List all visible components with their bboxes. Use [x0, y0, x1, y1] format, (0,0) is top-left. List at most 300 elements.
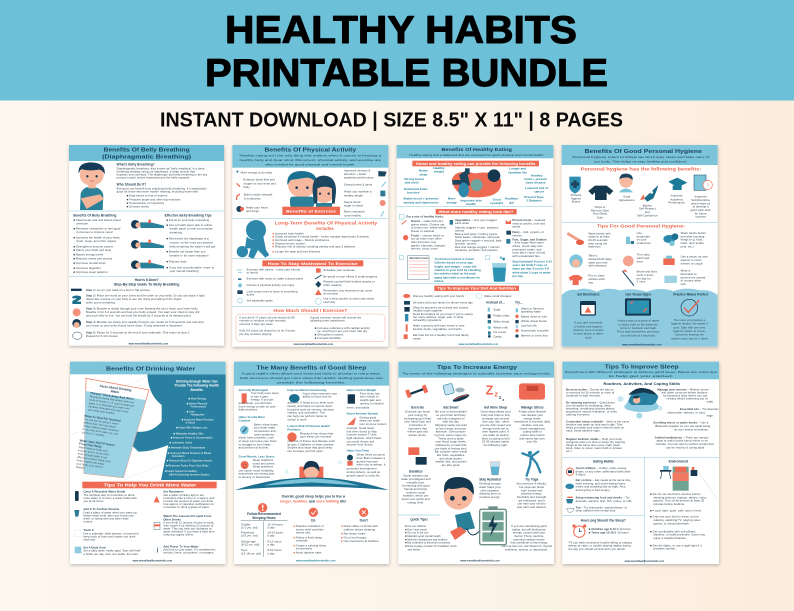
panel: eating habits	[565, 459, 633, 513]
list: benefits of belly breathing	[73, 214, 121, 274]
benefit icons row: Self-Confidence	[637, 213, 658, 217]
footer url: www.mentalhealthcenterkids.com	[459, 343, 499, 346]
tip: manage stress: energy levels.	[523, 416, 542, 420]
tips column one: wash your hair	[588, 260, 608, 264]
list: diet tips: Shop for groceries as a family and choose	[413, 305, 469, 309]
text block: food groups: Starchy veggies = corn, potatoes,	[455, 225, 499, 229]
column: right benefits: been linked to	[360, 395, 379, 399]
column: recommended sleeping hours: (6-12 yrs. old)	[241, 542, 259, 546]
footer url: www.mentalhealthcenterkids.com	[622, 343, 662, 346]
steps: object like a tissue on your belly to see the rising and falling of the object	[86, 297, 182, 301]
labels: right benefits	[508, 167, 549, 203]
column: left benefits: Helps You Be More	[239, 415, 265, 419]
tip: eat smart: are also good.	[442, 463, 460, 467]
tip: exercise: lessen stress.	[409, 433, 427, 437]
icon: glass with facts about drinking water: your body, your skin or	[76, 462, 103, 469]
column: practice makes perfect: gets. Start with one new	[674, 325, 706, 329]
tip: socialise	[401, 447, 431, 504]
column: left benefits: Sleep stabilizes	[253, 458, 274, 462]
list: water tips left: a bottle per day, then one bottle, then two.	[83, 552, 139, 556]
icon: glass with facts about drinking water: students throughout the day. Have	[88, 405, 129, 414]
tips column three: sleeve) to cover	[681, 258, 702, 262]
list: water tips left: each day.	[83, 537, 96, 541]
list: water tips left: Use a calendar, daily planner, or journal to	[83, 531, 139, 535]
heading: routines: Routines, Activities, And Coping Skills	[603, 382, 680, 386]
text block: benefits list: Well-Functioning Immune System	[169, 472, 210, 476]
tip: eat smart: Eat complex carbs inside	[435, 450, 468, 454]
tip: get more sleep: body and brain to fully	[481, 413, 511, 417]
list: water tips right: Add fruit to your water. Try strawberries,	[163, 548, 216, 552]
text block: stay hydrated: years old drink 7 cups of	[512, 263, 547, 267]
steps: your hand on your belly should move down. A long outbreath is important.	[86, 324, 183, 328]
icon: glass with facts about drinking water: Water Gets Rid Of Toxins	[79, 438, 115, 447]
tips column three: of viruses when	[681, 279, 702, 283]
panel: quick tips	[398, 515, 457, 551]
page: benefits of physical activity	[232, 145, 388, 347]
text block: food groups	[399, 214, 547, 258]
list: benefits of belly breathing: hormones to improve mood	[77, 230, 113, 234]
text block: food groups: spinach, sprouts	[455, 242, 477, 246]
tip: socialise: mentally tired.	[407, 480, 425, 484]
benefit icons row: Against	[571, 196, 581, 200]
column: don't: caffeine before sleeping	[344, 527, 376, 531]
page: tips to increase energy	[398, 362, 554, 564]
column: left benefits: solve problems,	[254, 432, 275, 436]
tips column one: with shampoo	[588, 264, 607, 268]
column: right benefits: has been found to help	[347, 429, 377, 433]
list: effective belly breathing tips: ■ Breathe out longer than you	[166, 250, 206, 254]
tip: eat smart: These tend to spike	[438, 436, 464, 440]
column: right benefits: your immune system	[359, 422, 387, 426]
column: left benefits: Better sleep helps	[254, 422, 278, 426]
banner: benefits of exercise: Benefits of Exercise	[286, 209, 336, 213]
tip: stay hydrated: allowing them to	[479, 492, 501, 496]
right benefits list: attention + better	[344, 172, 366, 176]
benefit icons row: Academic	[670, 197, 684, 201]
small changes table: Ice cream	[493, 330, 507, 334]
column: recommended sleeping hours: (3-5 yrs. old)	[241, 534, 258, 538]
list: long-term benefits: ■ Reduces risk of obesity including obesity and type 2 diabetes	[272, 245, 356, 249]
tip: get more sleep: energy levels are at	[483, 426, 509, 430]
column: set reminders: If you can't remember	[574, 321, 602, 325]
left benefits list: Enhance blood flow and	[243, 178, 275, 182]
intro text: Healthy eating isn't the only thing that matters when it comes to keeping a	[239, 154, 382, 158]
column: middle benefits: Improved Brain Functioning	[287, 388, 327, 392]
heading: how is it done: Step-By-Step Guide To Belly Breathing	[114, 283, 180, 287]
steps: Repeat for 5-10 minutes.	[86, 334, 119, 338]
column: use visual signs: you will look at it each day.	[621, 333, 656, 337]
text block: count calories: height, and weight – count the	[434, 264, 477, 268]
column: right benefits: Poor sleep has	[360, 391, 380, 395]
column: recommended sleeping hours: (13-18 yrs. old)	[241, 551, 261, 555]
icon: child sleeping on cloud	[618, 388, 662, 419]
panel: eating habits: Eating Habits	[593, 459, 614, 463]
list: motivation right: Use a step counter to count your steps	[323, 297, 375, 301]
text block: food groups: Dark green veggies = broccoli, kale,	[455, 239, 502, 243]
panel: how much exercise: following three ingredients:	[310, 319, 346, 323]
text block: benefits list: & Mood	[186, 421, 196, 425]
text block: overall good sleep: longer, healthier, and more fulfilling life!	[280, 499, 346, 503]
list: routines left: breathing, visualizing relaxing places,	[566, 406, 615, 410]
panel: how long should you sleep: ■ Teens age 13-18 8-10 hours	[589, 530, 629, 534]
column: left benefits: mood and stress.	[253, 461, 275, 465]
text block: count calories: aging label with a coordinator for	[434, 275, 481, 279]
list: routines right	[653, 387, 719, 449]
banner: how to stay motivated	[262, 260, 363, 266]
column: right benefits: Boost Immune System	[347, 411, 379, 415]
column: don't: ■ Eat heavy meals	[341, 531, 366, 535]
tip: eat smart: Eat Smart	[444, 405, 459, 409]
text block: food groups: Vegetables – vary your veggies	[455, 218, 497, 222]
column: do: ■ Practice relaxation or	[293, 524, 324, 528]
icon: glass with facts about drinking water: survive 1-2 months.	[82, 431, 105, 437]
column: practice makes perfect: Commit to keeping the	[675, 333, 704, 337]
list: water tips left: Set a daily water intake goal. Start with half	[83, 549, 140, 553]
text block: food groups: Red and orange veggies = carrots,	[455, 245, 501, 249]
list: motivation right: as exercise	[323, 292, 339, 296]
tip: manage stress	[514, 383, 551, 444]
text block: food groups: Protein foods – seafood,	[512, 218, 546, 222]
heading: how much should I exercise: How Much Should I Exercise?	[273, 308, 348, 313]
panel: quick tips: ■ Get out in the sun	[405, 532, 429, 535]
tip: get more sleep: z	[502, 398, 504, 402]
list: water tips left: before each meal, after you brush your	[83, 513, 134, 517]
text block: count calories: advice.	[434, 279, 444, 283]
left benefits list: & endurance	[244, 196, 261, 200]
benefit icons row: Protects	[571, 193, 582, 197]
list: routines left: bedtime and wake up time each night. This	[566, 423, 623, 427]
panel: how much exercise: If you are 6-17 years old you should do 60	[239, 315, 295, 319]
benefit icons row: Improves	[695, 195, 707, 199]
labels: right benefits: Prevent Type	[524, 195, 544, 199]
panel: quick tips: ■ Don't skip meals	[405, 528, 427, 531]
tip: manage stress: stress management	[520, 426, 545, 430]
benefit icons row: which helps us	[691, 201, 711, 205]
silhouette: body with benefits	[132, 374, 226, 480]
heading: Tips To Increase Energy	[437, 365, 518, 371]
icon: glass with facts about drinking water: Research shows that people with your	[90, 395, 135, 404]
footer url: www.mentalhealthcenterkids.com	[296, 560, 336, 563]
list: routines left: things at the same time every night (read	[566, 443, 620, 447]
list: water tips right: Other Drinks	[163, 517, 181, 521]
column: recommended sleeping hours: a day	[267, 542, 275, 546]
text block: benefits list: Circulation	[172, 454, 185, 458]
small changes table: Soda	[493, 307, 501, 311]
labels: left benefits: and teeth	[405, 181, 419, 185]
list: routines right: on your device at bedtime.	[674, 427, 709, 431]
tips column three: things (e.g. food,	[681, 238, 703, 242]
icon: glass with facts about drinking water	[76, 378, 149, 478]
column: recommended sleeping hours: Teen	[241, 548, 248, 552]
tip: exercise	[404, 385, 432, 437]
column: left benefits: daily activities.	[239, 408, 258, 412]
tips column two: Trim nails,	[637, 253, 650, 257]
list: effective belly breathing tips: breath pacer to help you practice	[170, 227, 213, 231]
column: don't	[341, 508, 379, 543]
benefit icons row: to develop a	[693, 205, 709, 209]
left benefits list: oxygen to your brain and	[243, 181, 276, 185]
intro text: Kids and teens should get more sleep than adults. Getting good sleep can	[240, 376, 383, 380]
list: routines left: to exercise for 30 minutes or more of	[566, 390, 615, 394]
column: do: stress relief activities	[296, 527, 324, 531]
benefit icons row: Remove Odor	[591, 208, 609, 212]
list: long-term benefits: ■ Strong immune system	[272, 241, 306, 245]
tip: exercise: relieve pain and	[407, 430, 428, 434]
panel: how long should you sleep: **If you have consistent trouble falling or staying	[568, 540, 632, 544]
column: right benefits: Sleep helps you grow	[357, 453, 386, 457]
list: diet tips: Read food labels so you know if you're eating	[413, 312, 473, 316]
text block: what's belly breathing: What's Belly Breathing?	[117, 163, 155, 167]
page: benefits of belly breathing	[69, 145, 224, 346]
list: effective belly breathing tips: breathing	[170, 231, 182, 235]
panel: eating habits: other caffeine-free herbal teas.	[576, 509, 616, 513]
banner: tips to help you drink more water	[82, 482, 217, 488]
list: long-term benefits	[272, 231, 369, 253]
tip: socialise: make you fatigued and	[401, 477, 431, 481]
text block: food groups: Dairy – milk, yogurts, or	[512, 230, 544, 234]
icon: two children	[287, 171, 336, 208]
small changes table: Candy	[493, 334, 502, 338]
small changes table: White bread	[493, 319, 510, 323]
column: recommended sleeping hours: a day	[267, 534, 275, 538]
tip: manage stress: Investment in exercise daily,	[514, 420, 551, 424]
list: long-term benefits: ■ Improved brain health	[272, 231, 304, 235]
column: right benefits: immune system T cells	[347, 433, 377, 437]
footer url: www.mentalhealthcenterkids.com	[460, 560, 501, 563]
column: middle benefits: as type 2 diabetes or heart disease.	[287, 442, 335, 446]
list: motivation left: Exercise with others – invite your friends	[247, 267, 300, 271]
text block: stay hydrated: water per day. If you're 4-8	[511, 267, 549, 271]
icon: glass with facts about drinking water: body of needs of 1-2 cups of water per	[89, 399, 135, 408]
text block: what's belly breathing: Diaphragmatic breathing, also known as "belly breathing" is a deep	[117, 166, 205, 170]
list: routines right: Youtube. You can also try written scripts that	[655, 442, 714, 446]
tip: eat smart: start the day.	[443, 420, 460, 424]
column: middle benefits: ability to focus and be	[303, 395, 332, 399]
tip: exercise: rate, blood flow, and	[405, 420, 431, 424]
labels: right benefits: cancer	[534, 190, 545, 194]
icon: glass with facts about drinking water: kidneys toxins. If you don't	[78, 449, 110, 457]
text block: stay hydrated: drink about 5 cups or water	[512, 270, 551, 274]
text block: food groups: Eat a mix of healthy foods:	[406, 215, 444, 219]
left benefits list: Helps your heart	[246, 205, 268, 209]
heading: long-term benefits	[275, 221, 378, 231]
intro text: Try some of the following strategies to naturally increase your energy levels.	[402, 371, 551, 375]
column: recommended sleeping hours: 8-10 hours	[267, 548, 282, 552]
list: benefits of belly breathing: brain, lungs, and other organs	[77, 239, 117, 243]
column: do: ■ Follow a fixed sleep	[293, 535, 322, 539]
text block: food groups: cut-up fruits more often	[411, 237, 442, 241]
tip: try yoga: both mental and	[521, 488, 543, 492]
list: routines right: chamomile, valerian, or clary	[667, 410, 706, 414]
small changes table: Baked chips or nuts	[521, 314, 548, 318]
heading: Benefits Of Good Personal Hygiene	[585, 149, 702, 155]
banner: what does healthy eating look like: What does healthy eating look like?	[438, 210, 514, 214]
illustration: child with battery	[444, 477, 506, 545]
tips column two: wash and	[637, 256, 650, 260]
list: routines right: Soothing music or audio books – Use a	[653, 421, 709, 425]
benefit icons row: good work ethic	[690, 208, 711, 212]
tips column one: after using the	[588, 241, 608, 245]
icon: glass with facts about drinking water: helps organs that waste	[77, 459, 105, 466]
tip: manage stress: can deplete your	[522, 413, 543, 417]
tip: try yoga: Flexibility and strength	[517, 495, 547, 499]
panel: eating habits: 4:00pm.	[576, 473, 586, 477]
list: routines left: progressive muscle relaxation, or other	[566, 409, 617, 413]
tips column two: teeth 2 times	[637, 273, 654, 277]
panel: environment: games, or doing homework.	[653, 521, 690, 525]
tip: socialise: Socialize	[409, 469, 423, 473]
tip: socialise: isolation, which can	[403, 494, 429, 498]
text block: benefits list: ■ Reduces Blood Or Digestion Issues	[167, 459, 213, 463]
list: diet tips: Discuss healthy eating with your family	[413, 294, 465, 298]
banner: tips to improve your diet: Tips To Improve Your Diet And Nutrition	[437, 287, 516, 291]
column: practice makes perfect: routine every day for 1 week	[671, 336, 708, 340]
top banner	[0, 0, 794, 100]
column: middle benefits: can increase your life span.	[287, 449, 324, 453]
intro text	[572, 155, 709, 163]
heading	[102, 147, 191, 161]
column: left benefits: Get Fully Recharged!	[239, 388, 268, 392]
tips column three: sick	[681, 282, 686, 286]
small changes table: Instead of...	[486, 300, 505, 304]
column: middle benefits: functions such as memory, decision	[287, 407, 334, 411]
list: water tips left: routine.	[83, 519, 93, 523]
panel: environment: ■ A cool, dark, quiet, calm room is best.	[650, 509, 702, 513]
tip: stay hydrated	[479, 462, 501, 499]
text block: food groups: berries, citrus, more!	[411, 247, 438, 251]
list: effective belly breathing tips: breathe in for more relaxation	[170, 253, 209, 257]
list: routines right: can be read by a caring adult.	[666, 445, 705, 449]
panel: how long should you sleep: ■ Children age 6-12 9-12 hours	[589, 527, 631, 531]
column: left benefits: exacerbate you strong post	[239, 472, 275, 476]
labels: left benefits: function	[407, 191, 420, 195]
heading: The Many Benefits of Good Sleep	[256, 365, 367, 371]
list: benefits of belly breathing: ■ Improves digestion	[73, 266, 101, 270]
text block: food groups: grains whole. Choose oat	[411, 222, 445, 226]
icon: nutrition facts label: Nutrition Facts	[410, 257, 429, 260]
column: practice makes perfect	[671, 293, 709, 340]
tip: get more sleep: z	[499, 395, 502, 400]
icon: glass with facts about drinking water: without food, but only about	[83, 421, 116, 429]
text block: food groups: Beans and peas = kidney beans,	[455, 232, 498, 236]
text block: benefits list: ■ Helps With Weight Loss	[176, 426, 208, 430]
column: right benefits: fight infection, which helps	[347, 436, 382, 440]
list: water tips right: If you drink 12 ounces of juice or soda,	[163, 521, 214, 525]
text block: food groups: each week.	[455, 221, 470, 225]
panel: quick tips: ■ Minimize distractions and bedtime	[405, 538, 448, 541]
labels: right benefits: Lowered risk of	[525, 186, 549, 190]
text block: medical advice: doctor. There could be	[514, 534, 544, 538]
text block: stay hydrated: per day.	[512, 274, 524, 278]
small changes table: Homemade smoothie	[521, 329, 549, 333]
text block: benefits list: Performance	[191, 405, 207, 409]
list: water tips left: Grab a glass of water when you wake up,	[83, 510, 138, 514]
list: water tips right: remember to drink a glass of water.	[163, 505, 210, 509]
intro text: also needed for good physical and mental health.	[265, 162, 356, 166]
right benefits list: healthy weight	[344, 193, 363, 197]
list: routines right: Bluetooth speaker so you can avoid being	[655, 424, 711, 428]
list: benefits of belly breathing: ■ Reduces stress and anxiety	[73, 257, 113, 261]
intro text	[239, 154, 382, 166]
heading: how is it done: How Is It Done?	[135, 278, 159, 282]
column: middle benefits: Good sleep improves your	[303, 391, 337, 395]
column: right benefits: weight gain and	[360, 398, 381, 402]
column: practice makes perfect: The more you practice a	[674, 318, 705, 322]
list: benefits of belly breathing: ■ Slows heart rate and lowers blood	[73, 218, 121, 222]
intro text: Personal hygiene refers to things we do to stay clean and take care of	[572, 155, 709, 159]
column: don't: ■ Use electronics at bedtime	[341, 539, 379, 543]
panel: environment: provides comfort.	[653, 547, 676, 551]
text block: food groups: carrots	[455, 228, 465, 232]
column: recommended sleeping hours: a day	[267, 526, 275, 530]
column: left benefits: more energy to take on your	[239, 404, 276, 408]
tip: socialise: Connecting with good	[402, 484, 430, 488]
column: recommended sleeping hours: 10-13 hours	[267, 531, 284, 535]
title: HEALTHY HABITS	[225, 9, 577, 52]
heading: Benefits Of Healthy Eating	[441, 147, 512, 152]
list: effective belly breathing tips: ■ Use a breath pacer app or online	[166, 223, 212, 227]
list: benefits of belly breathing: ■ Releases endorphins or feel-good	[73, 227, 121, 231]
small changes table: Whole milk	[493, 326, 508, 330]
column: left benefits: Sleep problems	[253, 465, 274, 469]
icon: glass with facts about drinking water: your body stay healthy.	[88, 408, 115, 415]
text block: benefits list: ■ Improves Brain Function	[182, 418, 214, 422]
column: practice makes perfect: hygiene routine at a time.	[673, 329, 706, 333]
text block: food groups: Fruits – choose whole or	[411, 233, 444, 237]
list: water tips right: Set Reminders	[163, 490, 184, 494]
text block: what's belly breathing: prompt muscle moves downward and the belly expands.	[117, 175, 190, 179]
heading: (Diaphragmatic Breathing)	[102, 155, 191, 161]
column: right benefits: Helps Control Weight	[347, 388, 376, 392]
tips column three: trash, door knobs,	[681, 241, 705, 245]
list: routines left: Consistent sleep schedule – Stick to the same	[566, 420, 630, 424]
right benefits list	[344, 169, 387, 217]
list: routines left: Do relaxing exercises – Quiet down	[566, 400, 615, 404]
panel: eating habits: meals and snacking late at night. Also,	[576, 485, 626, 489]
tip: stay hydrated: water helps your	[479, 485, 501, 489]
tip: eat smart	[435, 383, 470, 467]
column: set reminders: on your phone or alarm	[573, 332, 604, 336]
tip: manage stress: Manage Stress	[521, 405, 544, 409]
list: motivation left: or family	[247, 271, 258, 275]
labels: left benefits: Enhanced brain	[404, 187, 427, 191]
panel: how long should you sleep: How Long Should You Sleep?	[581, 518, 626, 522]
banner: benefits of exercise	[282, 207, 340, 215]
list: water tips left: Carry A Reusable Water Bottle	[83, 490, 126, 494]
list: water tips left: Track It	[83, 528, 94, 532]
tip: eat smart: your blood sugar levels,	[436, 440, 467, 444]
text block: medical advice: If you are maintaining good	[511, 524, 547, 528]
left benefits list	[236, 170, 276, 213]
text block: medical advice: problems, anxiety, or depression.	[505, 547, 548, 551]
right benefits list: Helps you maintain a	[344, 190, 372, 194]
list: motivation right: Schedule your workouts	[323, 268, 355, 272]
column: right benefits: growth hormone	[357, 459, 378, 463]
column: do: ■ Create a calming sleep	[293, 543, 327, 547]
tip: try yoga: Try Yoga	[525, 477, 538, 481]
icon: glass with facts about drinking water: affect your blood. Water also	[77, 456, 111, 464]
heading: how is it done	[114, 278, 180, 287]
list: effective belly breathing tips: ■ Practice daily	[166, 259, 187, 263]
column: use visual signs: or sticky note on the bathroom	[619, 322, 659, 326]
text block: food groups: cheese	[512, 233, 522, 237]
benefit icons row: Illness	[572, 200, 581, 204]
steps: when you're breathing.	[86, 301, 116, 305]
benefit icons row: From Body	[593, 212, 608, 216]
column: set reminders	[573, 293, 604, 339]
column: left benefits: to struggle to form ideas	[239, 442, 271, 446]
panel: how much exercise: exercise 3 days per week	[239, 322, 273, 326]
